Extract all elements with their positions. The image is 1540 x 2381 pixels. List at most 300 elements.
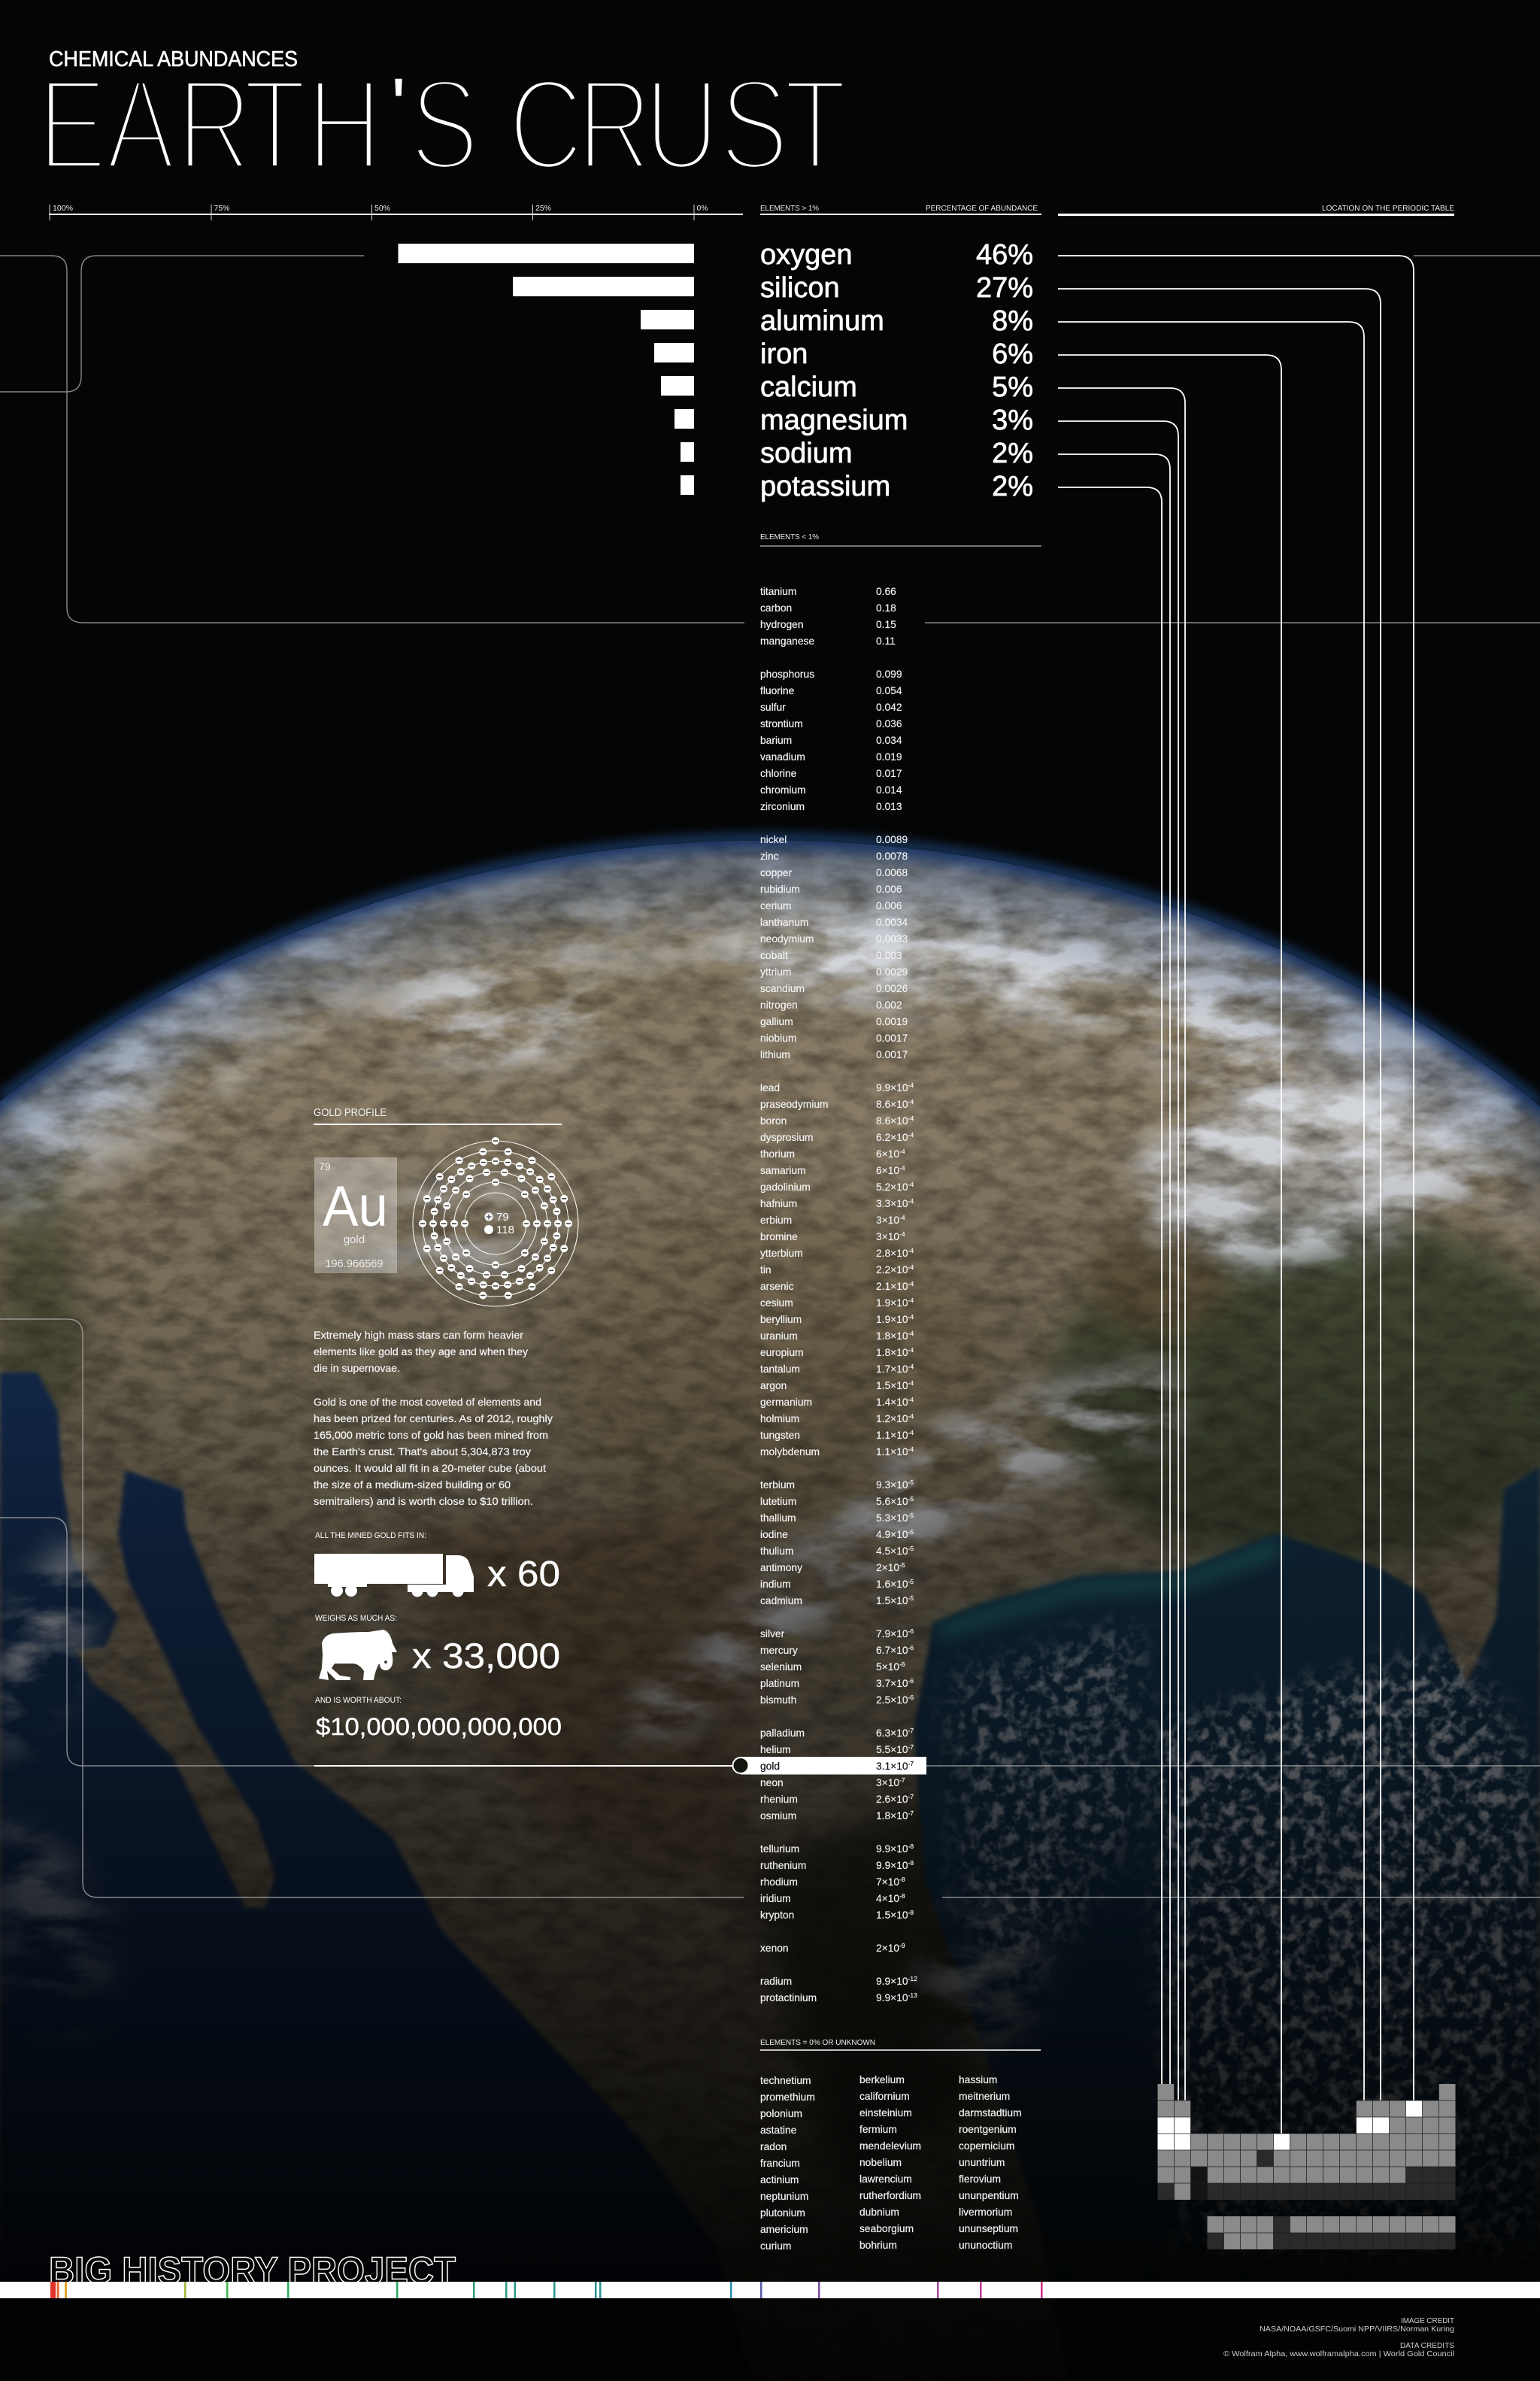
list: element values below 1%: -4 <box>908 1346 914 1354</box>
periodic table <box>1158 2084 1456 2249</box>
list: element values below 1%: 0.042 <box>876 702 902 713</box>
list: element values below 1%: 0.0019 <box>876 1016 908 1027</box>
list: element values below 1%: -7 <box>908 1793 914 1800</box>
list: element values below 1%: 2.6×10 <box>876 1794 908 1805</box>
body text: 165,000 metric tons of gold has been mined from <box>314 1429 548 1441</box>
value: times 60: x 60 <box>487 1554 560 1594</box>
list: unknown elements: ununoctium <box>959 2240 1012 2251</box>
list: unknown elements: fermium <box>859 2124 897 2135</box>
list: element values below 1%: 1.2×10 <box>876 1413 908 1424</box>
list: element names below 1%: thulium <box>760 1545 793 1557</box>
list: element values below 1%: 0.0029 <box>876 966 908 978</box>
list: element names below 1%: thallium <box>760 1512 796 1524</box>
title: S CRUST <box>410 52 847 198</box>
body text: the Earth's crust. That's about 5,304,873 troy <box>314 1445 531 1457</box>
list: unknown elements: polonium <box>760 2108 802 2119</box>
list: element values below 1%: 1.9×10 <box>876 1314 908 1325</box>
list: unknown elements: livermorium <box>959 2207 1012 2218</box>
value: times 33,000: x 33,000 <box>412 1636 560 1676</box>
list: major elements with percentages <box>760 239 1033 502</box>
table headers: elements above 1% <box>760 205 1041 214</box>
axis: percentage scale: 75% <box>214 205 230 213</box>
list: element names below 1%: selenium <box>760 1661 802 1673</box>
list: element names below 1%: titanium <box>760 586 796 597</box>
list: element values below 1%: -5 <box>908 1528 914 1536</box>
atom diagram: 79 <box>496 1211 509 1224</box>
list: element values below 1%: 2.5×10 <box>876 1694 908 1706</box>
list: unknown elements: neptunium <box>760 2191 808 2202</box>
list: element names below 1%: gallium <box>760 1016 793 1027</box>
list: element names below 1%: phosphorus <box>760 669 814 680</box>
list: unknown elements: meitnerium <box>959 2091 1010 2102</box>
list: element values below 1%: -4 <box>899 1148 905 1155</box>
list: unknown elements: technetium <box>760 2075 811 2086</box>
list: element values below 1%: 1.8×10 <box>876 1347 908 1358</box>
icon: elephant <box>319 1630 397 1680</box>
list: element names below 1%: neon <box>760 1777 784 1788</box>
credits: DATA CREDITS <box>1400 2341 1454 2350</box>
list: element names below 1%: terbium <box>760 1479 795 1491</box>
broad cloud veils <box>1143 1026 1502 1271</box>
list: element names below 1%: thorium <box>760 1148 795 1160</box>
atmosphere glow <box>0 839 1540 1104</box>
element tile: Au: 79 <box>319 1160 331 1172</box>
list: element values below 1%: -5 <box>908 1578 914 1585</box>
logo: Big History Project: BIG HISTORY PROJECT <box>49 2249 456 2292</box>
atom diagram <box>413 1141 578 1306</box>
list: unknown elements: astatine <box>760 2125 797 2136</box>
list: element values below 1%: 1.6×10 <box>876 1579 908 1590</box>
list: element names below 1%: ruthenium <box>760 1860 806 1871</box>
header: location on periodic table: LOCATION ON THE PERIODIC TABLE <box>1322 205 1454 213</box>
list: element names below 1%: zinc <box>760 851 779 862</box>
list: element names below 1%: palladium <box>760 1727 805 1739</box>
list: element values below 1%: -4 <box>908 1379 914 1387</box>
list: unknown elements: hassium <box>959 2074 997 2085</box>
list: element names below 1%: gold <box>760 1761 780 1772</box>
list: element values below 1%: 0.036 <box>876 718 902 729</box>
list: element values below 1%: 2×10 <box>876 1943 899 1954</box>
list: unknown elements: lawrencium <box>859 2173 912 2185</box>
list: element values below 1%: 9.9×10 <box>876 1976 908 1987</box>
list: element values below 1%: 1.1×10 <box>876 1446 908 1457</box>
list: element values below 1%: 6.7×10 <box>876 1645 908 1656</box>
list: element values below 1%: 3×10 <box>876 1777 899 1788</box>
list: element values below 1%: 2.2×10 <box>876 1264 908 1275</box>
list: unknown elements: francium <box>760 2158 800 2169</box>
list: element values below 1%: 0.18 <box>876 602 896 614</box>
list: element names below 1%: osmium <box>760 1810 796 1821</box>
list: major elements with percentages: oxygen <box>760 239 853 271</box>
list: element values below 1%: 5.6×10 <box>876 1496 908 1507</box>
list: element values below 1%: 1.5×10 <box>876 1909 908 1921</box>
list: element values below 1%: 2.8×10 <box>876 1248 908 1259</box>
list: element values below 1%: -9 <box>899 1942 905 1949</box>
shallow coastal water <box>940 1548 1278 1632</box>
list: element values below 1%: 0.054 <box>876 685 902 696</box>
list: unknown elements: ununpentium <box>959 2190 1019 2201</box>
body text: ounces. It would all fit in a 20-meter cube (about <box>314 1462 546 1474</box>
list: element values below 1%: -4 <box>908 1131 914 1139</box>
subtitle: CHEMICAL ABUNDANCES <box>49 47 298 71</box>
list: element values below 1%: 1.7×10 <box>876 1363 908 1375</box>
list: element values below 1%: 7×10 <box>876 1876 899 1888</box>
list: element values below 1%: 0.0033 <box>876 933 908 945</box>
list: element values below 1%: -6 <box>908 1677 914 1685</box>
label: semitrailer comparison: ALL THE MINED GOLD FITS IN: <box>315 1531 426 1540</box>
list: major elements with percentages: calcium <box>760 372 857 403</box>
list: element values below 1%: 9.9×10 <box>876 1992 908 2003</box>
atom diagram: 118 <box>496 1224 514 1236</box>
gray connector frames <box>0 256 1540 1897</box>
list: element names below 1%: bromine <box>760 1231 798 1242</box>
list: element values below 1%: -5 <box>899 1561 905 1569</box>
title: ' <box>391 62 406 150</box>
list: unknown elements: californium <box>859 2091 910 2102</box>
list: element values below 1%: 0.66 <box>876 586 896 597</box>
list: element names below 1%: yttrium <box>760 966 791 978</box>
list: element names below 1%: ytterbium <box>760 1248 803 1259</box>
list: unknown elements: copernicium <box>959 2140 1014 2152</box>
list: element values below 1%: 6×10 <box>876 1148 899 1160</box>
list: element names below 1%: antimony <box>760 1562 802 1573</box>
list: element values below 1%: -4 <box>908 1247 914 1254</box>
list: element values below 1%: 3.1×10 <box>876 1761 908 1772</box>
credits: NASA/NOAA/GSFC/Suomi NPP/VIIRS/Norman Kuring <box>1260 2325 1454 2334</box>
list: element values below 1%: -5 <box>908 1512 914 1519</box>
list: unknown elements: dubnium <box>859 2207 899 2218</box>
list: element names below 1%: cerium <box>760 900 791 911</box>
list: element names below 1%: tungsten <box>760 1430 800 1441</box>
axis: percentage scale: 100% <box>53 205 73 213</box>
list: element values below 1%: 0.017 <box>876 768 902 779</box>
body text: elements like gold as they age and when they <box>314 1345 528 1357</box>
element tile: Au: gold <box>344 1233 365 1246</box>
list: element values below 1%: 8.6×10 <box>876 1099 908 1110</box>
list: element values below 1%: 0.099 <box>876 669 902 680</box>
list: element values below 1%: 0.0078 <box>876 851 908 862</box>
list: element values below 1%: 5.5×10 <box>876 1744 908 1755</box>
element tile: Au: Au <box>323 1175 388 1239</box>
axis: percentage scale: 0% <box>696 205 708 213</box>
list: element values below 1%: -4 <box>908 1098 914 1106</box>
credits <box>1223 2316 1455 2358</box>
list: element names below 1%: cesium <box>760 1297 793 1309</box>
list: element values below 1%: 0.006 <box>876 900 902 911</box>
list: major elements with percentages: silicon <box>760 272 840 304</box>
list: element values below 1%: 5.2×10 <box>876 1181 908 1193</box>
list: element values below 1%: -6 <box>908 1627 914 1635</box>
list: element values below 1%: 0.11 <box>876 635 896 647</box>
timeline bar with colored element marks <box>0 2282 1540 2298</box>
list: element values below 1%: 4×10 <box>876 1893 899 1904</box>
list: element values below 1%: 0.003 <box>876 950 902 961</box>
list: element values below 1%: -4 <box>908 1429 914 1436</box>
list: element names below 1%: strontium <box>760 718 803 729</box>
connector lines to periodic table <box>1058 256 1414 2134</box>
popcorn clouds over gulf <box>677 1429 1540 2381</box>
list: element values below 1%: -5 <box>908 1545 914 1552</box>
list: unknown elements: plutonium <box>760 2207 805 2219</box>
list: element values below 1%: -8 <box>908 1843 914 1850</box>
list: unknown elements: seaborgium <box>859 2223 914 2234</box>
gold profile panel <box>314 1106 578 1740</box>
list: element values below 1%: 3.7×10 <box>876 1678 908 1689</box>
list: element values below 1%: 0.0034 <box>876 917 908 928</box>
list: element values below 1%: -4 <box>908 1363 914 1370</box>
list: element names below 1%: krypton <box>760 1909 794 1921</box>
list: element names below 1%: molybdenum <box>760 1446 820 1457</box>
list: unknown elements: curium <box>760 2240 791 2252</box>
list: element names below 1%: boron <box>760 1115 787 1127</box>
list: unknown elements: flerovium <box>959 2173 1001 2185</box>
list: element values below 1%: -12 <box>908 1975 917 1982</box>
list: element names below 1%: lutetium <box>760 1496 796 1507</box>
list: element names below 1%: gadolinium <box>760 1181 811 1193</box>
list: element values below 1%: 1.4×10 <box>876 1397 908 1408</box>
body text: Extremely high mass stars can form heavier <box>314 1329 523 1341</box>
list: element values below 1%: 3.3×10 <box>876 1198 908 1209</box>
list: element values below 1%: 6×10 <box>876 1165 899 1176</box>
list: element values below 1%: 9.9×10 <box>876 1082 908 1093</box>
list: element values below 1%: -4 <box>899 1230 905 1238</box>
list: major elements with percentages: magnesium <box>760 405 908 436</box>
list: unknown elements: darmstadtium <box>959 2107 1022 2119</box>
list: element values below 1%: 0.006 <box>876 884 902 895</box>
list: element names below 1%: rhenium <box>760 1794 798 1805</box>
list: element names below 1%: samarium <box>760 1165 806 1176</box>
list: element names below 1%: lead <box>760 1082 780 1093</box>
list: element values below 1%: 2.1×10 <box>876 1281 908 1292</box>
list: element names below 1%: lithium <box>760 1049 790 1060</box>
list: element names below 1%: helium <box>760 1744 791 1755</box>
list: element names below 1%: bismuth <box>760 1694 796 1706</box>
list: element names below 1%: indium <box>760 1579 791 1590</box>
list: element values below 1%: -7 <box>908 1743 914 1751</box>
list: element values below 1%: -4 <box>908 1297 914 1304</box>
list: element names below 1%: beryllium <box>760 1314 802 1325</box>
list: element names below 1%: nickel <box>760 834 787 845</box>
list: element values below 1%: -7 <box>908 1727 914 1734</box>
list: unknown elements: actinium <box>760 2174 799 2185</box>
list: element values below 1%: 1.8×10 <box>876 1330 908 1342</box>
list: element values below 1%: 0.002 <box>876 999 902 1011</box>
list: major elements with percentages: sodium <box>760 438 853 469</box>
list: element values below 1%: 1.1×10 <box>876 1430 908 1441</box>
list: element values below 1%: -6 <box>908 1694 914 1701</box>
list: element values below 1%: 7.9×10 <box>876 1628 908 1639</box>
list: element values below 1%: 0.014 <box>876 784 902 796</box>
bar chart: abundance above 1% <box>399 244 694 495</box>
list: element values below 1%: 0.034 <box>876 735 902 746</box>
list: unknown elements: nobelium <box>859 2157 902 2168</box>
header: elements below 1%: ELEMENTS < 1% <box>760 533 819 541</box>
list: element values below 1%: 6.3×10 <box>876 1727 908 1739</box>
limb shading <box>0 790 1540 2381</box>
list: element values below 1%: 4.9×10 <box>876 1529 908 1540</box>
list: element values below 1%: 0.0017 <box>876 1049 908 1060</box>
list: element names below 1%: carbon <box>760 602 792 614</box>
list: element names below 1%: rubidium <box>760 884 800 895</box>
ocean: pacific and gulf of california <box>0 1370 705 2279</box>
value: ten trillion dollars: $10,000,000,000,000 <box>316 1713 562 1740</box>
title <box>38 52 847 198</box>
list: element names below 1%: radium <box>760 1976 792 1987</box>
list: element values below 1%: 1.9×10 <box>876 1297 908 1309</box>
list: unknown elements: radon <box>760 2141 787 2152</box>
list: element values below 1%: -4 <box>908 1445 914 1453</box>
list: element names below 1%: iodine <box>760 1529 788 1540</box>
list: major elements with percentages: 2% <box>992 438 1033 469</box>
list: element values below 1%: 9.9×10 <box>876 1860 908 1871</box>
list: unknown elements: ununtrium <box>959 2157 1005 2168</box>
list: element values below 1%: 0.0026 <box>876 983 908 994</box>
land mottling <box>0 843 1540 2086</box>
list: major elements with percentages: 6% <box>992 338 1033 370</box>
list: element values below 1%: 9.9×10 <box>876 1843 908 1855</box>
list: element names below 1%: barium <box>760 735 792 746</box>
list: element names below 1%: nitrogen <box>760 999 798 1011</box>
list: unknown elements: mendelevium <box>859 2140 921 2152</box>
list: element values below 1%: -4 <box>908 1197 914 1205</box>
list: element values below 1%: 1.5×10 <box>876 1595 908 1606</box>
axis: percentage scale: 50% <box>374 205 390 213</box>
list: major elements with percentages: 5% <box>992 372 1033 403</box>
list: element names below 1%: scandium <box>760 983 805 994</box>
axis: percentage scale <box>49 205 743 220</box>
list: element names below 1%: vanadium <box>760 751 805 763</box>
body text: has been prized for centuries. As of 2012, roughly <box>314 1412 553 1424</box>
list: element values below 1%: -4 <box>908 1263 914 1271</box>
list: element names below 1%: argon <box>760 1380 787 1391</box>
list: element names below 1%: cobalt <box>760 950 788 961</box>
list: major elements with percentages: aluminum <box>760 305 884 337</box>
list: element names below 1%: iridium <box>760 1893 791 1904</box>
list: element names below 1% <box>760 586 828 2003</box>
list: element names below 1%: tin <box>760 1264 772 1275</box>
label: worth: AND IS WORTH ABOUT: <box>315 1696 402 1705</box>
list: element values below 1%: -4 <box>908 1115 914 1122</box>
cloud cover <box>0 790 1540 2381</box>
list: element values below 1%: -4 <box>899 1164 905 1172</box>
list: element names below 1%: xenon <box>760 1943 789 1954</box>
credits: © Wolfram Alpha, www.wolframalpha.com | World Gold Council <box>1223 2349 1454 2358</box>
list: unknown elements: roentgenium <box>959 2124 1017 2135</box>
list: element values below 1%: -4 <box>908 1330 914 1337</box>
list: element values below 1%: 0.0089 <box>876 834 908 845</box>
list: major elements with percentages: 3% <box>992 405 1033 436</box>
list: major elements with percentages: iron <box>760 338 808 370</box>
list: unknown elements: rutherfordium <box>859 2190 921 2201</box>
list: element values below 1%: -8 <box>899 1892 905 1900</box>
list: element values below 1%: -8 <box>899 1876 905 1883</box>
list: element names below 1%: platinum <box>760 1678 799 1689</box>
list: element names below 1%: chromium <box>760 784 806 796</box>
list: unknown elements: promethium <box>760 2091 815 2103</box>
list: element values below 1%: 1.5×10 <box>876 1380 908 1391</box>
list: element names below 1%: dysprosium <box>760 1132 814 1143</box>
list: element values below 1%: -5 <box>908 1495 914 1503</box>
list: element values below 1%: 4.5×10 <box>876 1545 908 1557</box>
list: element values below 1%: -4 <box>908 1396 914 1403</box>
list: element names below 1%: tellurium <box>760 1843 799 1855</box>
list: element values below 1% <box>876 586 917 2003</box>
list: element names below 1%: protactinium <box>760 1992 817 2003</box>
list: element values below 1%: -4 <box>908 1280 914 1288</box>
list: element values below 1%: 1.8×10 <box>876 1810 908 1821</box>
body text: the size of a medium-sized building or 60 <box>314 1479 511 1491</box>
list: unknown elements: berkelium <box>859 2074 905 2085</box>
list: element names below 1%: europium <box>760 1347 804 1358</box>
body text <box>314 1329 553 1507</box>
list: element names below 1%: sulfur <box>760 702 786 713</box>
ocean: gulf of mexico and atlantic <box>914 1467 1540 2381</box>
list: element names below 1%: neodymium <box>760 933 814 945</box>
list: element values below 1%: -7 <box>908 1809 914 1817</box>
list: element values below 1%: 5.3×10 <box>876 1512 908 1524</box>
list: element names below 1%: copper <box>760 867 793 878</box>
list: major elements with percentages: 46% <box>976 239 1033 271</box>
list: element values below 1%: 2×10 <box>876 1562 899 1573</box>
list: element values below 1%: 0.013 <box>876 801 902 812</box>
list: element values below 1%: -4 <box>908 1412 914 1420</box>
list: element values below 1%: 0.019 <box>876 751 902 763</box>
list: element values below 1%: -13 <box>908 1991 917 1999</box>
list: element values below 1%: -6 <box>908 1644 914 1652</box>
planet surface <box>0 790 1540 2381</box>
earth photograph illustration <box>0 827 1540 2243</box>
list: major elements with percentages: 2% <box>992 471 1033 502</box>
list: element names below 1%: manganese <box>760 635 814 647</box>
list: element values below 1%: -4 <box>899 1214 905 1221</box>
list: element names below 1%: uranium <box>760 1330 798 1342</box>
list: unknown elements: americium <box>760 2224 808 2235</box>
element tile: Au: 196.966569 <box>325 1258 383 1270</box>
list: element names below 1%: holmium <box>760 1413 799 1424</box>
list: element values below 1%: 0.0017 <box>876 1033 908 1044</box>
body text: Gold is one of the most coveted of elements and <box>314 1396 541 1408</box>
list: element values below 1%: 0.0068 <box>876 867 908 878</box>
list: element values below 1%: -7 <box>899 1776 905 1784</box>
list: element names below 1%: chlorine <box>760 768 797 779</box>
list: element values below 1%: 3×10 <box>876 1231 899 1242</box>
list: element names below 1%: tantalum <box>760 1363 800 1375</box>
list: major elements with percentages: 8% <box>992 305 1033 337</box>
list: element names below 1%: arsenic <box>760 1281 794 1292</box>
gold highlight row <box>314 1757 926 1775</box>
list: element names below 1%: rhodium <box>760 1876 798 1888</box>
list: unknown elements: einsteinium <box>859 2107 912 2119</box>
bottom fade to black <box>0 790 1540 2381</box>
list: element values below 1%: 0.15 <box>876 619 896 630</box>
heading: gold profile: GOLD PROFILE <box>314 1106 387 1119</box>
list: element values below 1%: -5 <box>908 1479 914 1486</box>
list: element names below 1%: niobium <box>760 1033 796 1044</box>
list: element values below 1%: -8 <box>908 1909 914 1916</box>
list: element names below 1%: hafnium <box>760 1198 797 1209</box>
header: elements at zero or unknown: ELEMENTS = 0% OR UNKNOWN <box>760 2039 875 2047</box>
list: element values below 1%: -6 <box>899 1661 905 1668</box>
list: element names below 1%: erbium <box>760 1215 792 1226</box>
label: elephant comparison: WEIGHS AS MUCH AS: <box>315 1614 397 1623</box>
list: element values below 1%: -8 <box>908 1859 914 1867</box>
list: element names below 1%: hydrogen <box>760 619 804 630</box>
list: element names below 1%: germanium <box>760 1397 812 1408</box>
body text: die in supernovae. <box>314 1362 400 1374</box>
title: EARTH <box>38 52 382 198</box>
icon: semitrailer truck <box>314 1554 474 1597</box>
list: element names below 1%: silver <box>760 1628 785 1639</box>
